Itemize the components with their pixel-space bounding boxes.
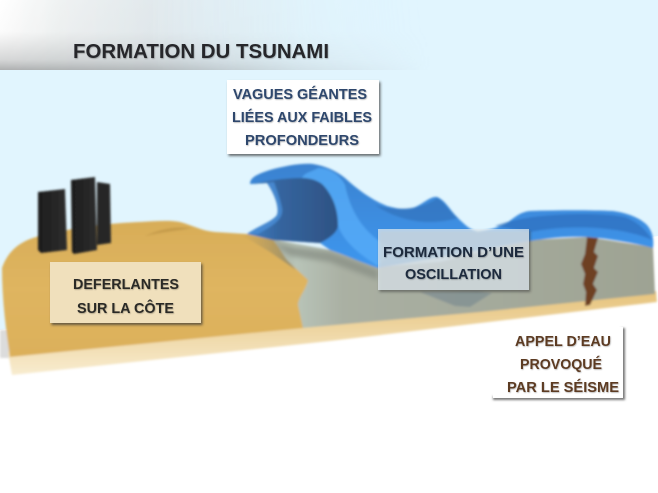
- label: deferlantes: SUR LA CÔTE: [77, 299, 174, 317]
- label: appel d'eau: PROVOQUÉ: [520, 356, 602, 373]
- seabed: grey slope: [265, 237, 655, 328]
- wave face: [247, 178, 338, 243]
- sand: coast: [2, 221, 308, 357]
- wave inner glow: [247, 182, 282, 234]
- label: vagues geantes: PROFONDEURS: [245, 132, 359, 149]
- water: light folds: [302, 168, 395, 266]
- seabed shadow: [275, 244, 378, 280]
- water body: [247, 164, 653, 268]
- label: vagues geantes: [227, 80, 379, 154]
- building: back: [97, 182, 111, 245]
- label: deferlantes: DEFERLANTES: [73, 276, 179, 293]
- label: appel d'eau: APPEL D’EAU: [515, 333, 611, 350]
- terrain block: [0, 164, 657, 375]
- seabed lip: [8, 291, 657, 375]
- label: oscillation: [378, 229, 529, 290]
- lightning: seismic rift: [581, 237, 598, 306]
- header band: [0, 0, 378, 70]
- label: deferlantes: [50, 262, 201, 323]
- label: vagues geantes: VAGUES GÉANTES: [233, 86, 367, 103]
- label: appel d'eau: [493, 327, 625, 400]
- label: vagues geantes: LIÉES AUX FAIBLES: [232, 109, 372, 126]
- building: left: [38, 189, 67, 253]
- left shadow: [0, 330, 12, 358]
- label: appel d'eau: PAR LE SÉISME: [507, 379, 619, 396]
- building: centre: [71, 177, 97, 254]
- label: oscillation: OSCILLATION: [405, 266, 502, 283]
- label: oscillation: FORMATION D’UNE: [383, 244, 524, 261]
- buildings: [38, 177, 111, 254]
- sand shading: [145, 227, 192, 236]
- title: FORMATION DU TSUNAMI: [73, 41, 329, 63]
